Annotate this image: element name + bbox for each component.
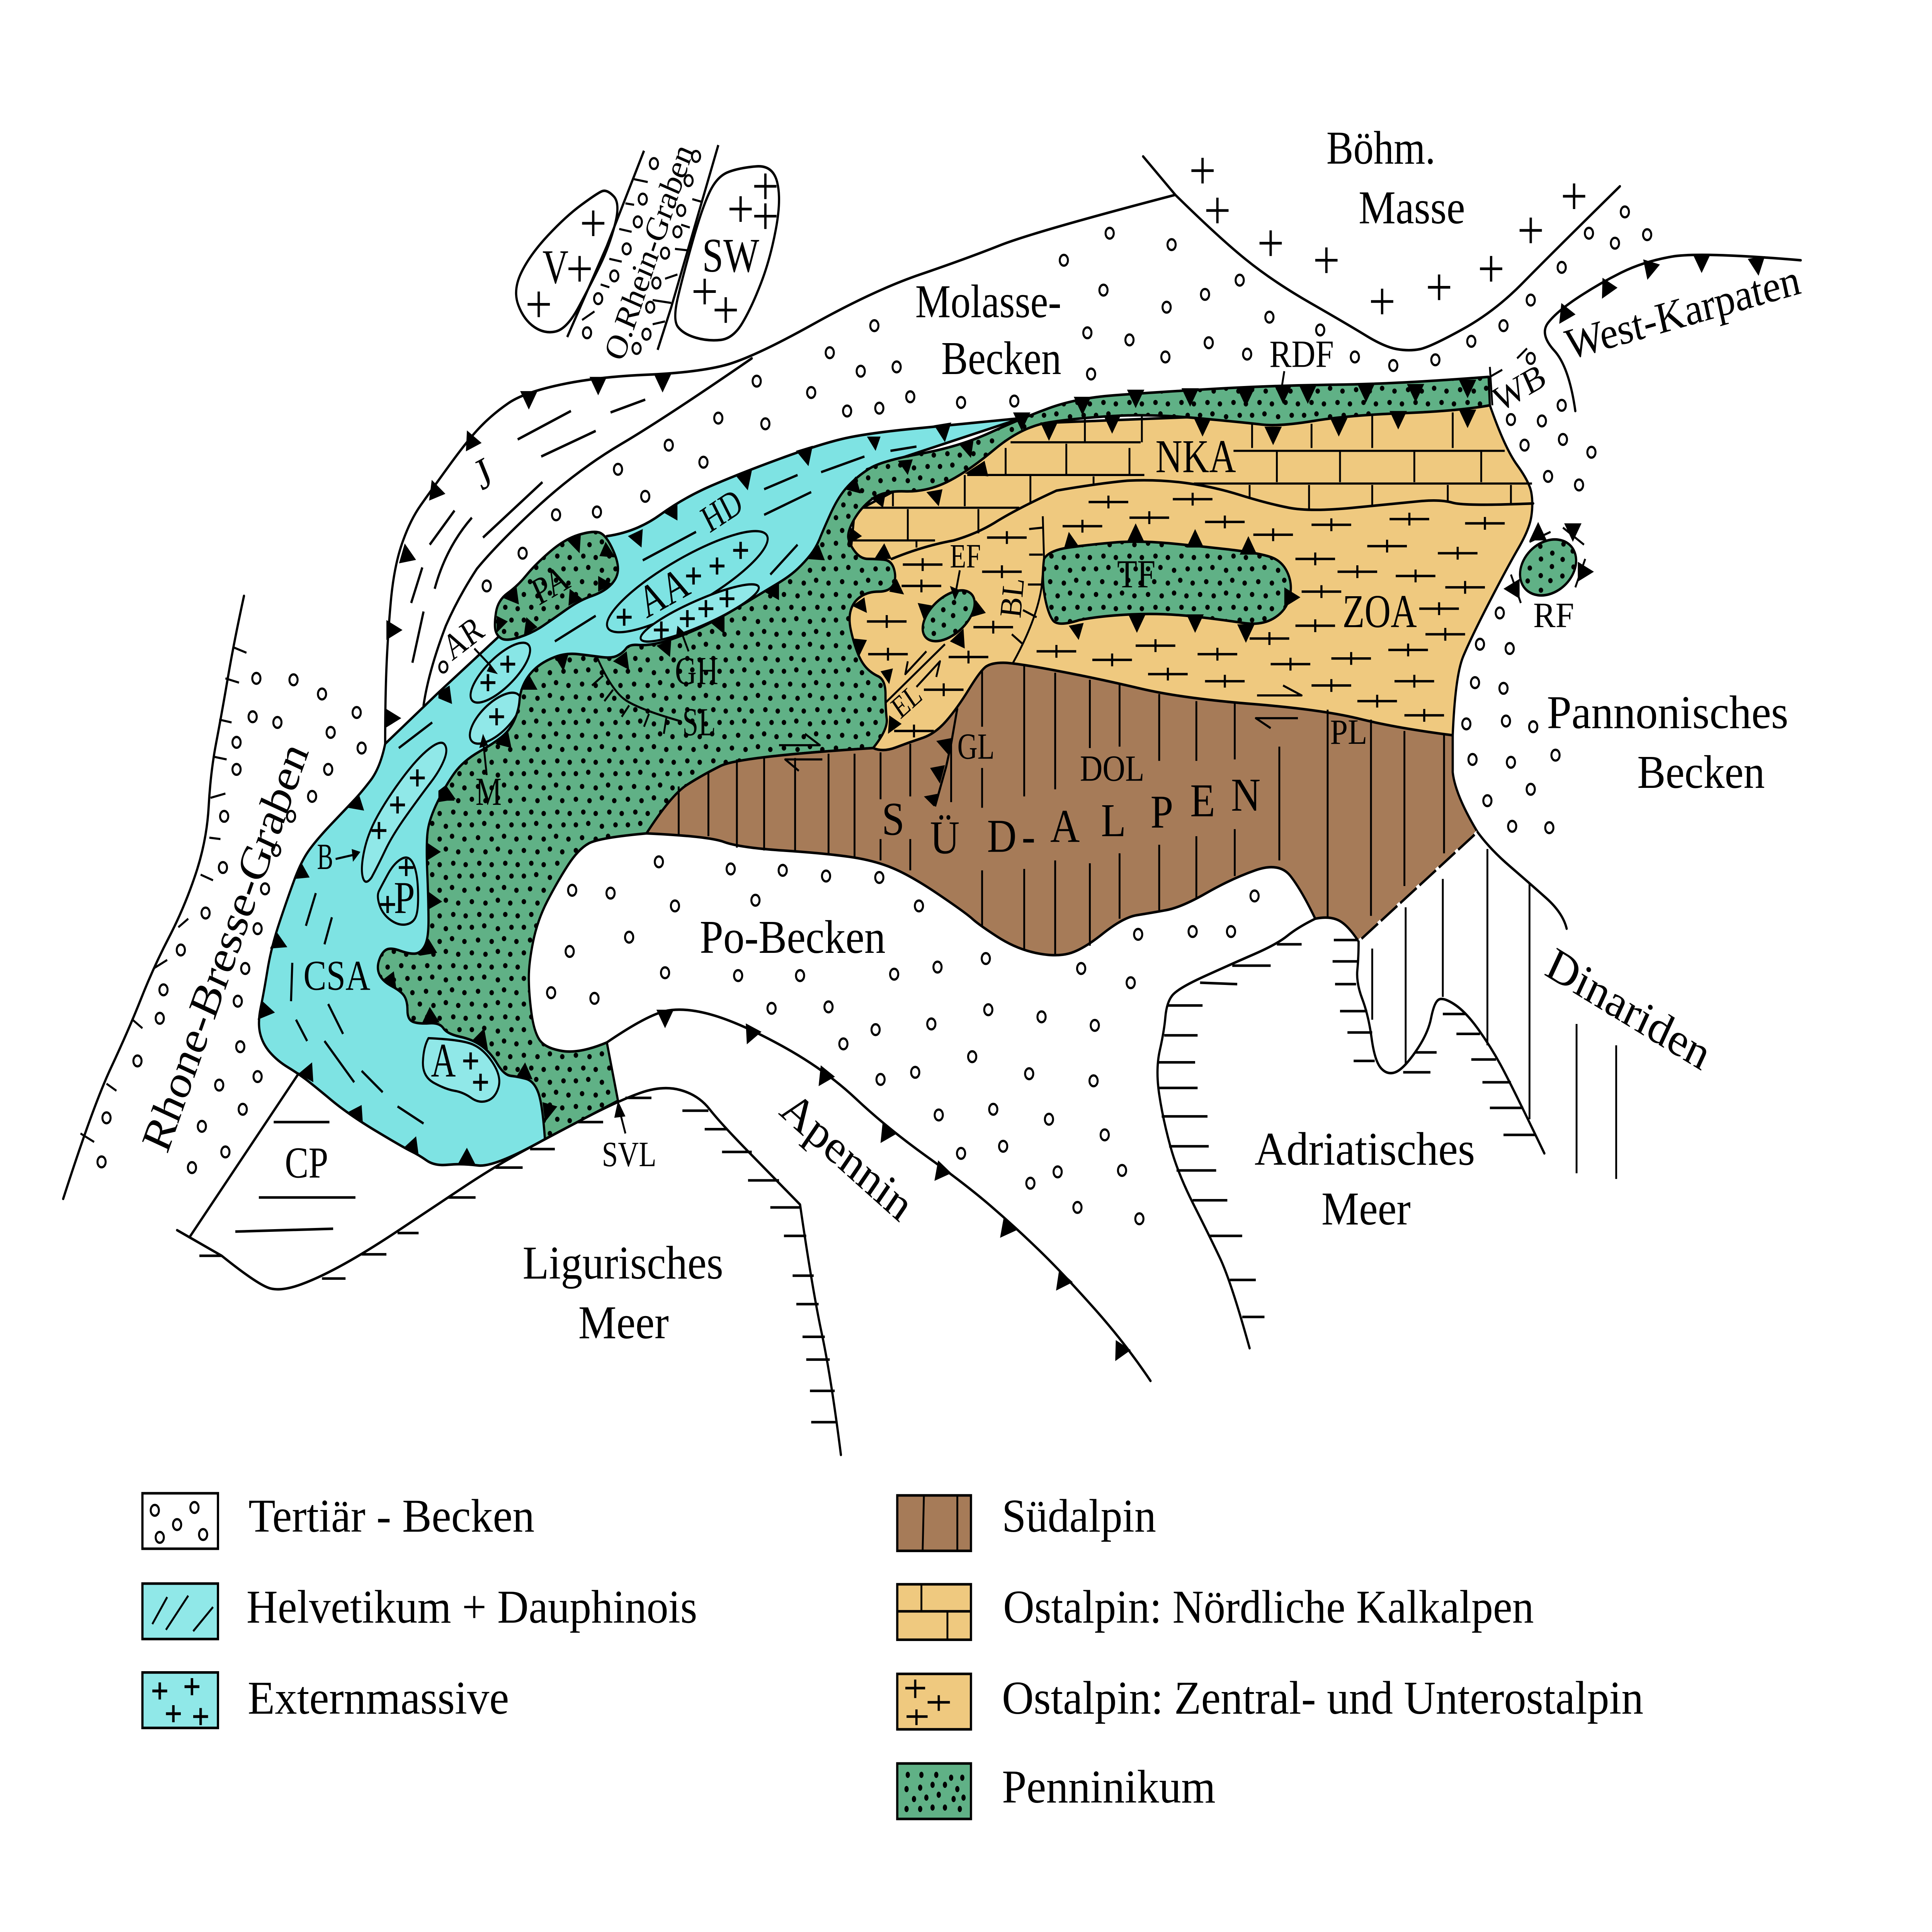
labels: map text: N <box>1231 769 1260 821</box>
labels: map text: WB <box>1487 356 1551 419</box>
labels: map text: L <box>1101 794 1126 847</box>
labels: map text: SVL <box>602 1134 656 1174</box>
legend item: Helvetikum + Dauphinois <box>143 1581 697 1639</box>
window: RF <box>1511 528 1585 607</box>
labels: map text: Pannonisches <box>1547 687 1788 738</box>
labels: map text: CSA <box>303 952 370 999</box>
labels: map text: NKA <box>1155 430 1236 483</box>
legend item: Ostalpin Zentral- und Unterostalpin: Ostalpin: Zentral- und Unterostalpin <box>1002 1672 1643 1724</box>
massif: AA <box>598 514 777 651</box>
arrows: leader lines <box>336 570 960 1133</box>
labels: map text: PL <box>1330 712 1367 752</box>
labels: map text: ZOA <box>1342 585 1417 638</box>
labels: map text: HD <box>695 481 749 541</box>
massif: Vosges <box>516 191 617 332</box>
legend item: Penninikum <box>897 1761 1216 1819</box>
legend item: Externmassive <box>143 1672 509 1728</box>
legend item: Tertiär - Becken: Tertiär - Becken <box>248 1490 534 1542</box>
labels: map text: P <box>394 872 415 923</box>
labels: map text: Becken <box>941 332 1061 384</box>
labels: map text: Po-Becken <box>700 911 886 963</box>
labels: map text: SW <box>702 229 759 282</box>
symbols: thrust teeth <box>258 437 1083 1165</box>
labels: map text: Dinariden <box>1539 937 1719 1080</box>
labels: map text: J <box>468 448 499 500</box>
labels: map text: M <box>476 769 502 814</box>
labels: map text: S <box>882 793 905 845</box>
labels: map text: West-Karpaten <box>1561 255 1804 369</box>
block: CP <box>189 1074 355 1237</box>
labels: map text: Meer <box>578 1297 669 1349</box>
window: EF <box>915 580 983 651</box>
labels: map text: EF <box>950 537 981 575</box>
labels: map text: Böhm. <box>1327 122 1435 174</box>
legend item: Ostalpin Nördliche Kalkalpen <box>897 1581 1534 1640</box>
labels: map text: CP <box>285 1139 328 1187</box>
labels: map text: AA <box>631 557 696 628</box>
labels: map text: PA <box>526 556 575 614</box>
map: tectonic map of the Alps <box>63 122 1804 1455</box>
labels: map text: O.Rhein-Graben <box>597 139 700 366</box>
labels: map text: Masse <box>1359 182 1465 234</box>
legend <box>143 1490 1643 1819</box>
region: Penninikum (green) <box>378 377 1585 1139</box>
labels: map text: A <box>1050 800 1080 852</box>
labels: map text: GL <box>957 726 995 767</box>
labels: map text: Rhone-Bresse-Graben <box>133 735 318 1159</box>
labels: map text: A <box>431 1034 456 1087</box>
massif: AR <box>463 633 537 712</box>
labels: map text: - <box>1022 810 1035 862</box>
legend item: Helvetikum + Dauphinois: Helvetikum + Dauphinois <box>247 1581 697 1633</box>
region: Helvetikum (cyan) <box>259 418 1022 1166</box>
labels: map text: E <box>1190 775 1215 827</box>
graben: Rhone-Bresse <box>63 596 247 1199</box>
labels: map text: Apennin <box>772 1081 922 1231</box>
labels: map text: B <box>317 837 333 877</box>
labels: map text: D <box>987 810 1017 862</box>
labels: map text: P <box>1151 786 1173 838</box>
thrust: Apennin <box>607 1010 1151 1381</box>
massif: A <box>423 1038 499 1102</box>
labels: map text: EL <box>886 677 927 725</box>
massif: Schwarzwald <box>675 166 779 340</box>
labels: map text: Adriatisches <box>1255 1123 1475 1175</box>
klippe: PA <box>495 532 618 640</box>
massif: M <box>463 684 528 753</box>
legend item: Externmassive: Externmassive <box>248 1672 509 1724</box>
labels: map text: DOL <box>1080 748 1145 789</box>
symbols: Tertiary basin pebbles <box>97 151 1651 1224</box>
thrust: West-Karpaten <box>1282 255 1801 411</box>
coast: Ligurisches Meer <box>177 1088 841 1455</box>
legend item: Ostalpin Nördliche Kalkalpen: Ostalpin: Nördliche Kalkalpen <box>1003 1581 1534 1633</box>
labels: map text: RF <box>1533 595 1574 635</box>
symbols: more thrust teeth <box>385 374 1594 728</box>
labels: map text: GH <box>675 649 718 693</box>
boundary: Molasse basin and Jura thrust <box>385 195 1175 744</box>
labels: map text: Ü <box>930 812 959 864</box>
graben: Oberrhein <box>567 145 718 350</box>
region: Dinariden <box>1372 832 1616 1179</box>
window: TF <box>1043 542 1291 624</box>
labels: map text: V <box>543 240 568 294</box>
labels: map text: Molasse- <box>915 276 1061 327</box>
labels: map text: Meer <box>1321 1183 1411 1235</box>
labels: map text: BL <box>993 576 1031 619</box>
labels: map text: SL <box>682 700 716 744</box>
labels: map text <box>133 122 1804 1349</box>
labels: map text: AR <box>436 608 490 668</box>
labels: map text: TF <box>1117 552 1155 596</box>
region: Südalpin (brown) <box>646 663 1478 956</box>
labels: map text: Ligurisches <box>523 1237 723 1289</box>
legend item: Südalpin <box>897 1490 1156 1551</box>
region: Ostalpin (tan) <box>842 405 1533 768</box>
legend item: Tertiär - Becken <box>143 1490 534 1549</box>
labels: map text: RDF <box>1269 333 1334 376</box>
labels: map text: Becken <box>1637 746 1765 798</box>
massif: Belledonne <box>362 743 446 882</box>
legend item: Südalpin: Südalpin <box>1002 1490 1156 1542</box>
boundary: Bohemian Massif <box>1143 156 1620 350</box>
massif: P <box>378 857 418 925</box>
legend item: Penninikum: Penninikum <box>1002 1761 1216 1813</box>
coast: Adriatisches Meer <box>1158 919 1544 1348</box>
